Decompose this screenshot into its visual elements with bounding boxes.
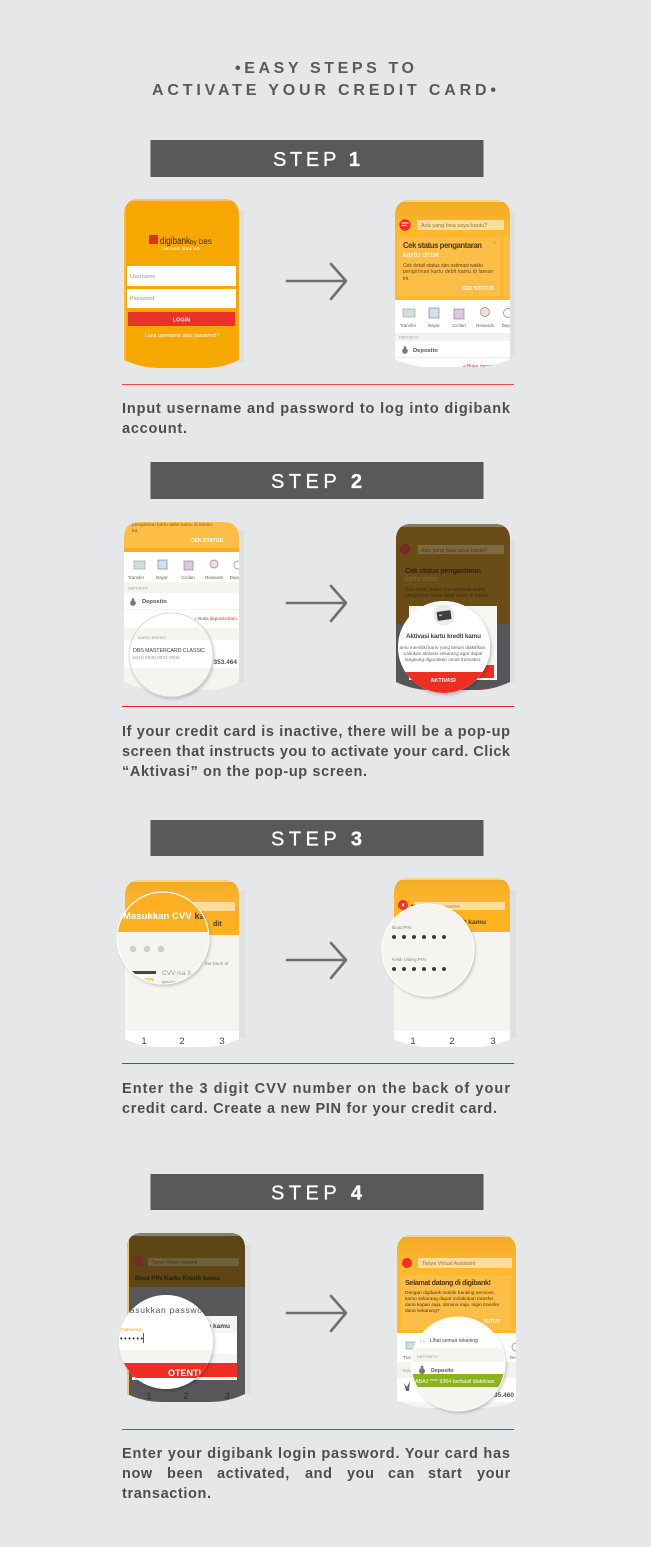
- step 4 text: and: [305, 1466, 333, 1482]
- step 4 heading: STEP 4: [271, 1182, 363, 1204]
- step 4 text: been: [167, 1466, 203, 1482]
- status card: CEK STATUS: [462, 286, 495, 292]
- welcome card: dana sekarang?: [405, 1308, 440, 1314]
- phone: home screen: [395, 200, 515, 370]
- arrow: [287, 586, 346, 621]
- phone: activation success: TABUNGAN: [402, 1369, 423, 1373]
- phone: activation success: 35.460: [494, 1392, 514, 1399]
- phone: new PIN screen: Assistant: [444, 904, 461, 908]
- step 1 heading: STEP 1: [273, 149, 360, 171]
- phone: activation pop-up: Ada yang bisa saya bantu?: [421, 548, 487, 554]
- phone: activation success: Tran: [403, 1355, 413, 1360]
- phone: password dialog: [119, 1233, 251, 1402]
- arrow: [287, 264, 346, 299]
- step 4 text: you: [347, 1466, 375, 1482]
- phone: activation success: [397, 1235, 520, 1411]
- magnifier: success message: Lihat semua rekening: [430, 1338, 478, 1344]
- menu icons: Transfer: [400, 323, 417, 328]
- title: •EASY STEPS TO: [235, 60, 414, 77]
- digibank logo: by DBS: [190, 239, 213, 246]
- menu icons: Bayar: [428, 323, 440, 328]
- step 2 text: “Aktivasi” on the pop-up screen.: [122, 764, 367, 780]
- step 4 section: [119, 1174, 520, 1502]
- step 1 heading: [150, 140, 484, 177]
- status card: pengiriman kartu debit kamu di laman: [403, 269, 493, 275]
- login button: LOGIN: [173, 318, 190, 324]
- phone: new PIN screen: N Kartu: [411, 904, 435, 911]
- phone: new PIN screen: 2: [449, 1036, 455, 1047]
- phone: activation pop-up: [396, 524, 515, 694]
- menu icons: Rewards: [476, 323, 495, 328]
- forgot password link: Lupa username atau password?: [145, 333, 219, 339]
- step 4 text: Enter your digibank login password. Your card has: [122, 1446, 510, 1462]
- deposito row: Deposito: [413, 348, 438, 354]
- phone: password dialog: Buat PIN Kartu Kredit kamu: [135, 1275, 220, 1282]
- username field: Username: [130, 274, 155, 280]
- phone: activation success: De: [510, 1355, 516, 1360]
- divider: [122, 706, 514, 707]
- step 3 text: Enter the 3 digit CVV number on the back of your: [122, 1081, 510, 1097]
- phone: activation pop-up: Cek status pengantaran: [405, 566, 481, 575]
- step 2 section: [122, 462, 515, 780]
- phone: scrolled home screen: Transfer: [128, 575, 145, 580]
- magnifier: CVV input: CVV: [145, 977, 154, 982]
- magnifier: password entry: OTENTI: [168, 1368, 201, 1378]
- digibank logo: Live more, Bank less: [162, 246, 200, 251]
- phone: login screen: [124, 199, 244, 368]
- step 4 text: activated,: [217, 1466, 290, 1482]
- phone: scrolled home screen: pengiriman kartu debit kamu di laman: [132, 522, 212, 528]
- step 2 text: [122, 724, 511, 780]
- deposito row: [395, 333, 510, 370]
- phone: scrolled home screen: Cicilan: [181, 575, 195, 580]
- phone: new PIN screen: 3: [490, 1036, 496, 1047]
- step 3 text: [122, 1081, 510, 1117]
- step 4 text: can: [388, 1466, 415, 1482]
- phone: CVV screen: dit: [213, 921, 222, 928]
- magnifier: success message: Deposito: [431, 1368, 454, 1374]
- arrow: [287, 943, 346, 978]
- status card: ×: [493, 240, 497, 247]
- title: [152, 60, 496, 99]
- phone: CVV screen: 3: [219, 1036, 225, 1047]
- phone: password dialog: 2: [183, 1391, 189, 1402]
- step 3 heading: STEP 3: [271, 828, 362, 850]
- phone: scrolled home screen: + Buka deposito baru: [194, 616, 237, 621]
- step 4 text: transaction.: [122, 1486, 211, 1502]
- magnifier: activation prompt: Lakukan aktivasi sekarang agar dapat: [404, 651, 483, 656]
- magnifier: CVV input: Masukkan CVV ka: [123, 911, 206, 922]
- phone: scrolled home screen: Bayar: [156, 575, 168, 580]
- magnifier: PIN dots: Buat PIN: [392, 925, 412, 931]
- menu icons: [400, 308, 513, 328]
- magnifier: CVV input: CVV isa 3: [162, 970, 191, 977]
- magnifier: activation prompt: amu memiliki kartu yang belum diaktifkan.: [399, 645, 487, 650]
- step 3 heading: [150, 820, 484, 856]
- magnifier: success message: ABAJ **** 9364 berhasil diaktivasi: [415, 1379, 494, 1385]
- password field: [127, 289, 236, 308]
- phone: scrolled home screen: Rewards: [205, 575, 224, 580]
- phone: scrolled home screen: [124, 522, 244, 697]
- divider: [122, 384, 514, 385]
- step 2 text: screen that instructs you to activate your card. Click: [122, 744, 511, 760]
- phone: activation pop-up: + Buka deposito: [476, 686, 508, 691]
- magnifier: card name: [129, 612, 213, 697]
- username field: [127, 266, 236, 286]
- phone: CVV screen: [117, 880, 245, 1047]
- step 2 heading: STEP 2: [271, 471, 362, 493]
- phone: password dialog: 1: [146, 1391, 152, 1402]
- step 2 text: If your credit card is inactive, there will be a pop-up: [122, 724, 510, 740]
- welcome card: kamu sekarang dapat melakukan transfer: [405, 1296, 494, 1302]
- phone: scrolled home screen: 353.464: [214, 659, 237, 666]
- welcome card: Dengan digibank mobile banking services,: [405, 1290, 495, 1296]
- magnifier: password entry: Masukkan passwo: [122, 1305, 202, 1315]
- status card: ini.: [403, 276, 409, 282]
- phone: scrolled home screen: Deposito: [142, 599, 167, 605]
- phone: password dialog: Tanya Virtual Assistant: [152, 1260, 198, 1264]
- phone: password dialog: 3: [224, 1391, 230, 1402]
- step 1 text: account.: [122, 421, 187, 437]
- magnifier: CVV input: [117, 892, 209, 985]
- step 1 section: [122, 140, 515, 437]
- step 4 text: [122, 1446, 511, 1502]
- phone: scrolled home screen: CEK STATUS: [191, 538, 224, 544]
- magnifier: success message: [411, 1317, 505, 1411]
- step 4 text: now: [122, 1466, 153, 1482]
- phone: new PIN screen: ×: [401, 903, 405, 909]
- magnifier: password entry: ••••••: [120, 1336, 144, 1343]
- password field: Password: [130, 296, 154, 302]
- status card: Cek detail status dan estimasi waktu: [403, 263, 483, 269]
- phone: new PIN screen: kredit kamu: [448, 919, 486, 926]
- status card: Cek status pengantaran: [403, 241, 482, 250]
- welcome card: TUTUP: [483, 1319, 501, 1325]
- phone: CVV screen: the back of: [205, 961, 229, 967]
- step 4 text: your: [477, 1466, 511, 1482]
- phone: scrolled home screen: DEPOSITO: [128, 586, 148, 590]
- step 3 section: [117, 820, 516, 1117]
- magnifier: activation prompt: Aktivasi kartu kredit kamu: [406, 633, 481, 640]
- title: ACTIVATE YOUR CREDIT CARD•: [152, 82, 496, 99]
- divider: [122, 1429, 514, 1430]
- magnifier: password entry: [119, 1295, 213, 1389]
- magnifier: activation prompt: [398, 601, 490, 694]
- phone: activation pop-up: Cek detail status dan estimasi waktu: [405, 587, 486, 593]
- magnifier: password entry: Password: [120, 1327, 141, 1333]
- magnifier: PIN dots: Ketik Ulang PIN: [392, 957, 426, 963]
- step 2 heading: [150, 462, 484, 499]
- step 4 heading: [150, 1174, 484, 1210]
- phone: home screen: Ada yang bisa saya bantu?: [421, 223, 487, 229]
- phone: new PIN screen: 1: [410, 1036, 416, 1047]
- step 1 text: Input username and password to log into digibank: [122, 401, 511, 417]
- login button: [128, 312, 235, 326]
- phone: activation pop-up: kartu debit: [405, 576, 438, 583]
- welcome card: Selamat datang di digibank!: [405, 1278, 491, 1287]
- magnifier: activation prompt: AKTIVASI: [430, 678, 456, 684]
- magnifier: success message: DEPOSITO: [417, 1354, 438, 1359]
- step 3 text: credit card. Create a new PIN for your credit card.: [122, 1101, 497, 1117]
- magnifier: card name: DBS MASTERCARD CLASSIC: [133, 648, 205, 654]
- magnifier: card name: 5410 6930 0072 9005: [133, 655, 180, 661]
- divider: [122, 1063, 514, 1064]
- phone: password dialog: n kamu: [207, 1323, 230, 1330]
- arrow: [287, 1296, 346, 1331]
- deposito row: DEPOSITO: [399, 336, 419, 340]
- magnifier: card name: KARTU KREDIT: [138, 636, 166, 640]
- step 1 text: [122, 401, 511, 437]
- magnifier: success message: ‹ ›: [420, 1339, 425, 1345]
- welcome card: dana kapan saja, dimana saja. Ingin transfer: [405, 1302, 500, 1308]
- phone: CVV screen: 2: [179, 1036, 185, 1047]
- phone: activation pop-up: pengiriman kartu debit kamu di laman: [405, 593, 489, 599]
- magnifier: PIN dots: [382, 904, 474, 996]
- digibank logo: [149, 235, 213, 251]
- digibank logo: digibank: [160, 236, 191, 247]
- phone: scrolled home screen: ini.: [132, 528, 138, 534]
- magnifier: CVV input: WAHP: [162, 980, 175, 985]
- status card: [397, 237, 510, 296]
- menu icons: Depo: [502, 323, 513, 328]
- status card: kartu debit: [403, 250, 440, 259]
- magnifier: activation prompt: langsung digunakan untuk transaksi.: [405, 657, 481, 662]
- step 4 text: start: [428, 1466, 462, 1482]
- menu icons: Cicilan: [452, 323, 466, 328]
- phone: CVV screen: 1: [141, 1036, 147, 1047]
- phone: activation success: Tanya Virtual Assistant: [422, 1261, 476, 1267]
- phone: new PIN screen: [382, 878, 516, 1047]
- deposito row: + Buka deposito baru: [463, 364, 510, 370]
- welcome card: [401, 1275, 511, 1330]
- phone: scrolled home screen: Depo: [230, 575, 241, 580]
